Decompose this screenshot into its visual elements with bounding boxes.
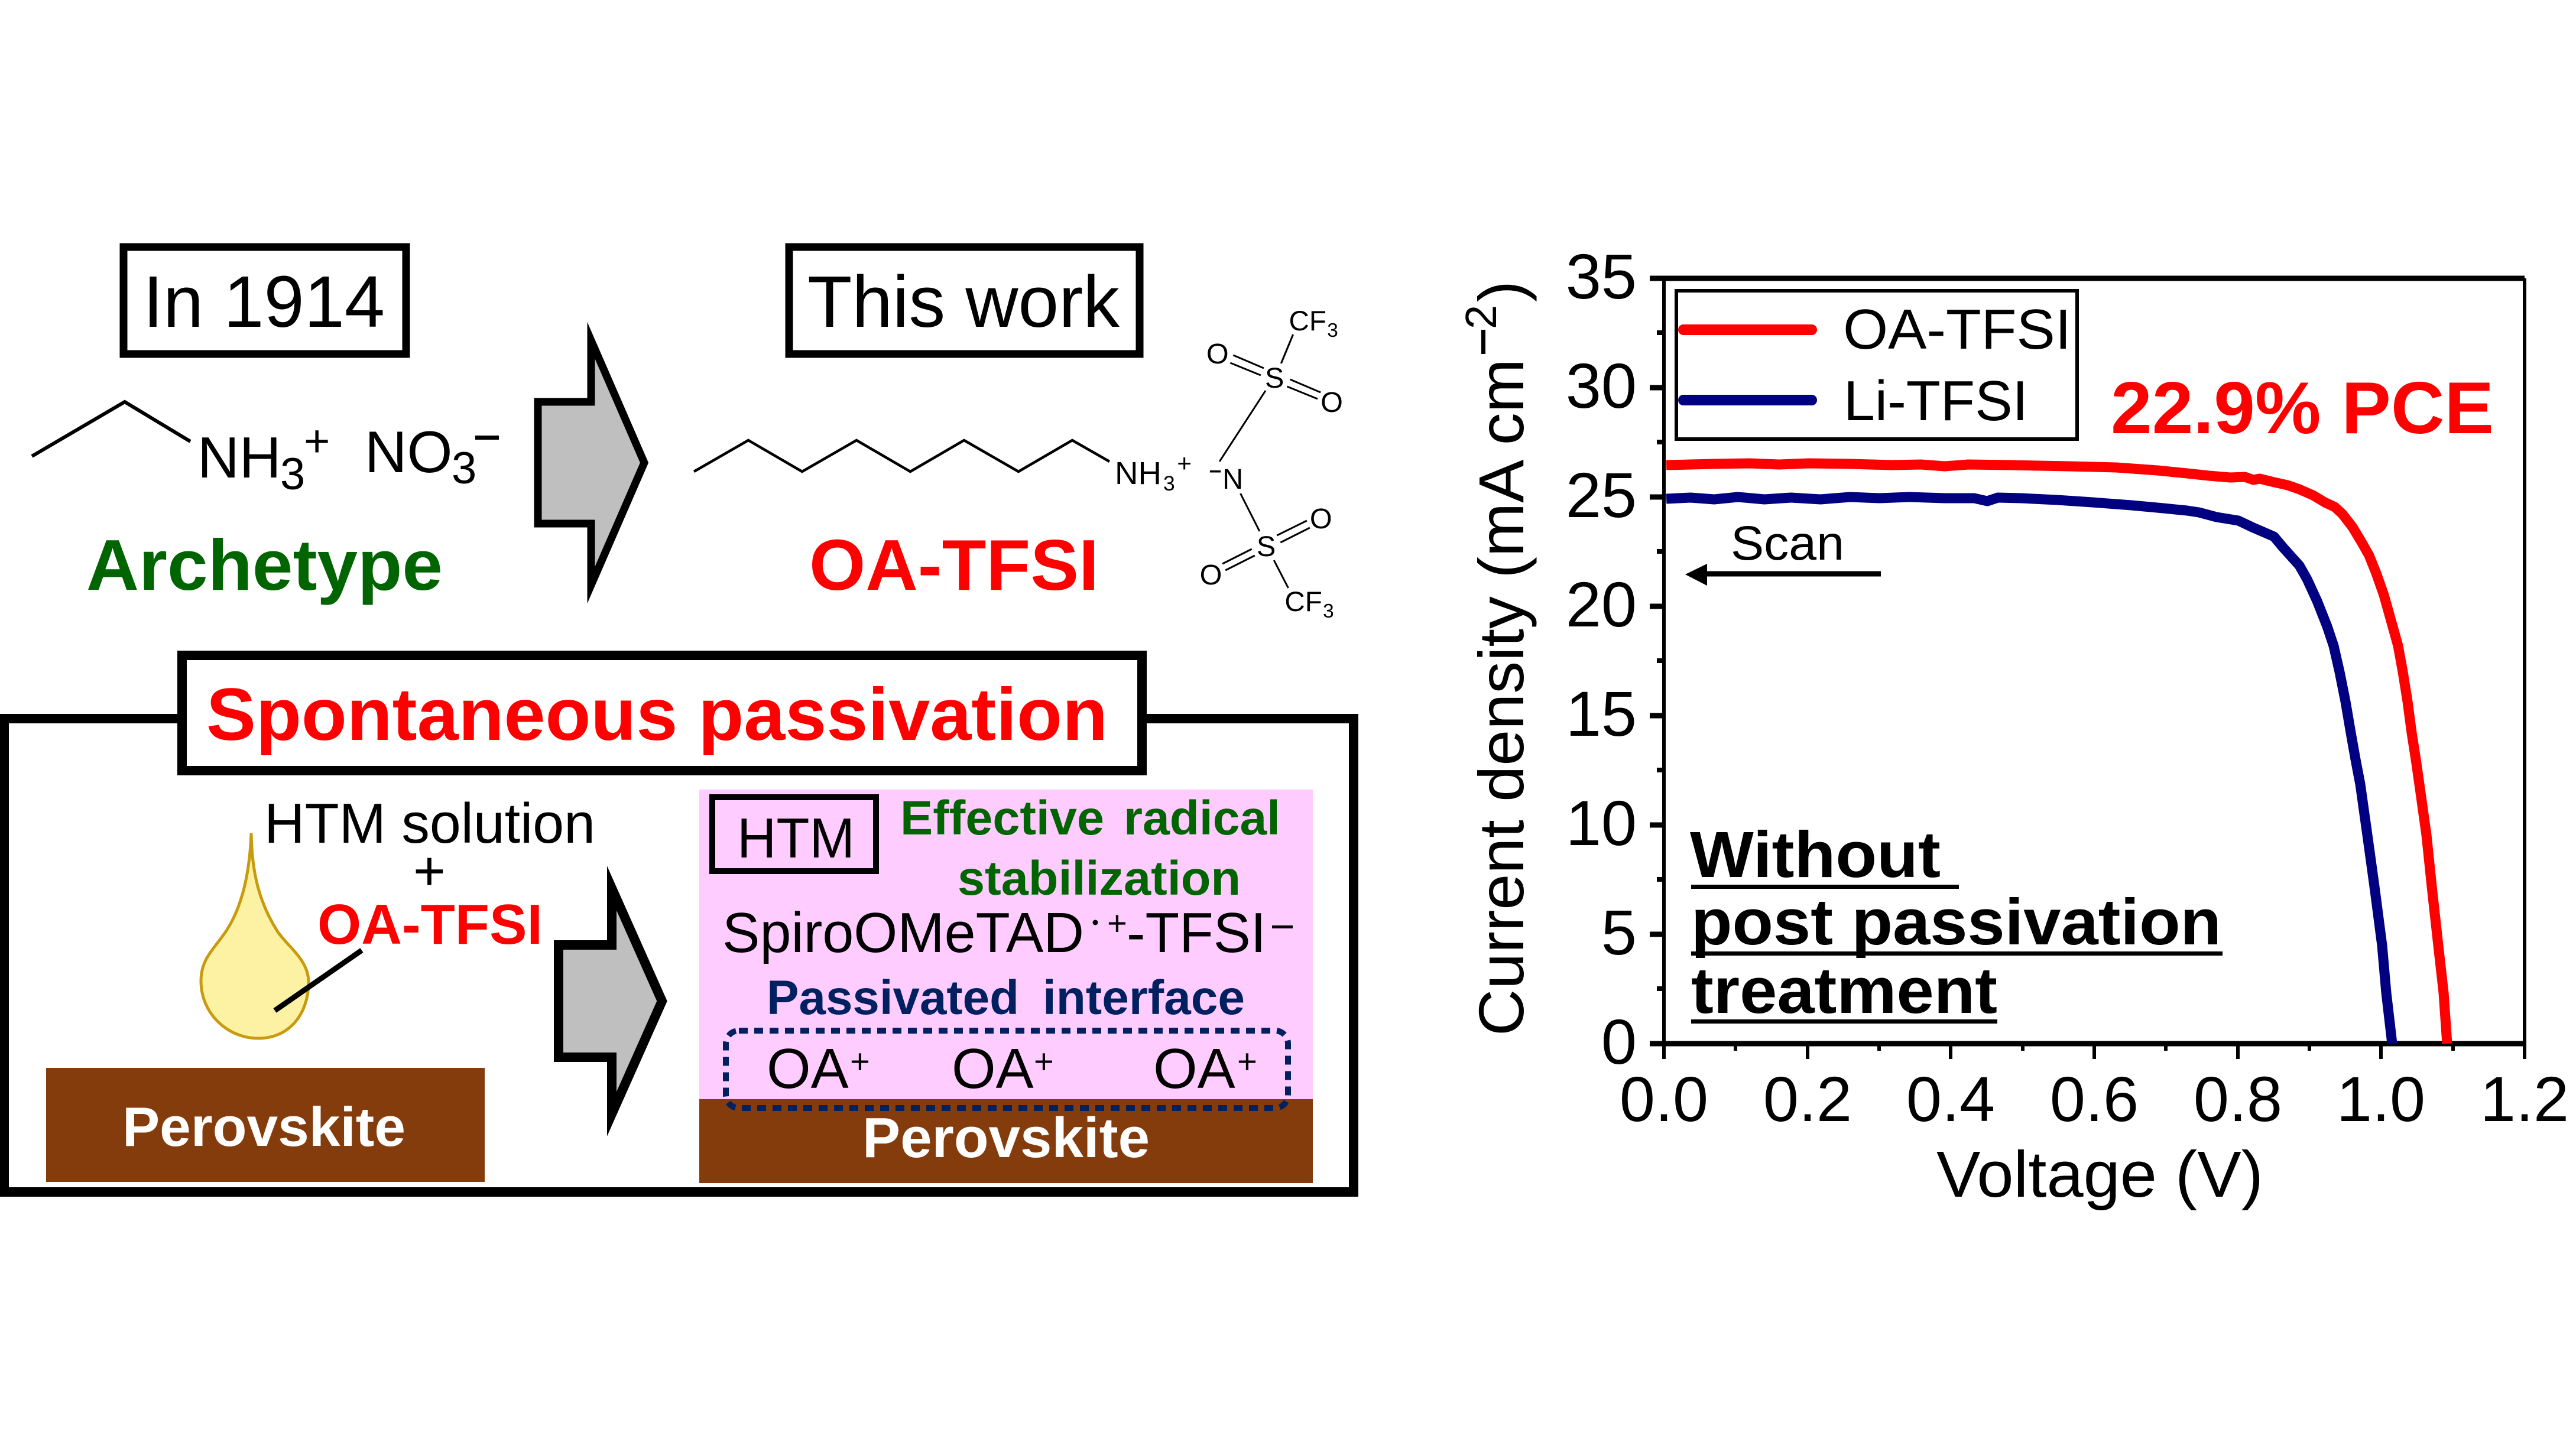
note: without post passivation treatment: post passivation	[1691, 886, 2221, 959]
scan direction arrow	[1685, 517, 1881, 586]
heading: Spontaneous passivation: Spontaneous passivation	[206, 674, 1108, 756]
curve: OA-TFSI	[1666, 463, 2447, 1044]
molecule: ethylammonium nitrate: NH	[197, 425, 281, 490]
molecule: ethylammonium nitrate: 3	[452, 443, 476, 493]
molecule: OA-TFSI structure: O	[1310, 503, 1332, 535]
molecule: ethylammonium nitrate	[32, 402, 499, 499]
text: HTM solution + OA-TFSI: OA-TFSI	[317, 893, 543, 956]
x axis title: Voltage (V)	[1936, 1138, 2263, 1211]
OA+ cations row: OA	[1153, 1037, 1235, 1100]
perovskite layer: left	[46, 1068, 485, 1182]
heading: This work	[789, 247, 1140, 354]
text: SpiroOMeTAD radical cation TFSI: -TFSI	[1127, 901, 1266, 964]
molecule: OA-TFSI structure	[694, 306, 1343, 622]
y axis tick labels: 15	[1566, 678, 1637, 749]
legend: OA-TFSI	[1843, 298, 2071, 361]
molecule: ethylammonium nitrate: 3	[280, 449, 305, 499]
label: HTM	[712, 797, 876, 871]
note: without post passivation treatment	[1690, 818, 2223, 1027]
perovskite layer: left: Perovskite	[122, 1096, 405, 1158]
molecule: OA-TFSI structure: O	[1200, 559, 1222, 591]
note: without post passivation treatment: Without	[1690, 818, 1941, 891]
callout: 22.9% PCE: 22.9% PCE	[2111, 368, 2494, 449]
x axis tick labels: 1.0	[2337, 1063, 2425, 1135]
molecule: OA-TFSI structure: 3	[1323, 600, 1334, 622]
text: SpiroOMeTAD radical cation TFSI	[722, 901, 1293, 964]
dotted interface outline	[726, 1031, 1288, 1108]
OA+ cations row: +	[1237, 1042, 1257, 1081]
x axis tick labels: 0.6	[2050, 1063, 2139, 1135]
y axis tick labels: 35	[1566, 241, 1637, 312]
OA+ cations row: OA	[767, 1037, 849, 1100]
molecule: OA-TFSI structure: CF	[1289, 306, 1326, 337]
legend	[1676, 291, 2077, 439]
arrow: solution to passivated stack	[559, 888, 662, 1114]
text: SpiroOMeTAD radical cation TFSI: SpiroOMeTAD	[722, 901, 1084, 964]
heading: This work: This work	[807, 262, 1120, 343]
y axis title: Current density (mA cm	[1465, 359, 1537, 1036]
OA+ cations row: +	[850, 1042, 870, 1081]
heading: Spontaneous passivation	[182, 655, 1142, 771]
scan direction arrow: Scan	[1731, 517, 1844, 570]
text: effective radical stabilization: stabilization	[958, 852, 1241, 905]
panel: HTM layer	[699, 790, 1313, 1100]
molecule: OA-TFSI structure: S	[1265, 362, 1284, 394]
perovskite layer: right	[699, 1099, 1313, 1183]
curve: Li-TFSI	[1666, 497, 2392, 1044]
x axis tick labels: 0.0	[1620, 1063, 1708, 1135]
x axis tick labels: 0.2	[1763, 1063, 1852, 1135]
label: HTM: HTM	[737, 807, 855, 870]
OA+ cations row: +	[1034, 1042, 1054, 1081]
label: Archetype: Archetype	[86, 525, 443, 605]
x axis tick labels: 0.8	[2194, 1063, 2282, 1135]
OA+ cations row: OA	[952, 1037, 1034, 1100]
y axis tick labels: 25	[1566, 459, 1637, 531]
text: HTM solution + OA-TFSI: +	[413, 840, 446, 902]
molecule: ethylammonium nitrate: NO	[365, 419, 453, 485]
y axis tick labels: 20	[1566, 569, 1637, 640]
molecule: OA-TFSI structure: O	[1206, 338, 1229, 370]
note: without post passivation treatment: treatment	[1691, 954, 1997, 1027]
chart: J-V curves	[1456, 241, 2569, 1211]
panel: spontaneous passivation	[4, 655, 1354, 1192]
molecule: OA-TFSI structure: +	[1177, 449, 1192, 477]
perovskite layer: right: Perovskite	[862, 1106, 1150, 1170]
text: effective radical stabilization: radical	[1124, 791, 1280, 845]
heading: In 1914	[124, 247, 406, 354]
molecule: OA-TFSI structure: 3	[1163, 472, 1175, 495]
panel: in 1914 archetype	[32, 247, 499, 605]
text: SpiroOMeTAD radical cation TFSI: +	[1107, 904, 1127, 943]
text: HTM solution + OA-TFSI: HTM solution	[264, 792, 595, 855]
plot frame and ticks	[1650, 278, 2525, 1059]
y axis title: )	[1465, 281, 1537, 302]
text: HTM solution + OA-TFSI	[264, 792, 595, 956]
label: OA-TFSI: OA-TFSI	[809, 525, 1099, 605]
y axis tick labels: 10	[1566, 787, 1637, 859]
y axis tick labels: 30	[1566, 350, 1637, 421]
x axis tick labels: 1.2	[2480, 1063, 2569, 1135]
y axis tick labels: 0	[1601, 1006, 1637, 1077]
text: passivated interface: Passivated	[767, 971, 1019, 1025]
y axis tick labels	[1566, 241, 1637, 1077]
text: passivated interface: interface	[1043, 971, 1245, 1025]
panel: this work OA-TFSI	[694, 247, 1343, 622]
molecule: OA-TFSI structure: O	[1321, 386, 1343, 418]
x axis tick labels: 0.4	[1906, 1063, 1995, 1135]
text: passivated interface	[767, 971, 1245, 1025]
molecule: OA-TFSI structure: N	[1222, 463, 1243, 495]
heading: In 1914: In 1914	[143, 262, 385, 343]
molecule: OA-TFSI structure: 3	[1327, 320, 1338, 342]
y axis title: 2	[1456, 305, 1506, 329]
text: effective radical stabilization	[900, 791, 1280, 905]
y axis tick labels: 5	[1601, 896, 1637, 968]
molecule: OA-TFSI structure: CF	[1284, 586, 1322, 618]
x axis tick labels	[1620, 1063, 2569, 1135]
OA+ cations row	[767, 1037, 1257, 1100]
legend: Li-TFSI	[1844, 369, 2028, 433]
molecule: ethylammonium nitrate: +	[304, 416, 330, 466]
molecule: OA-TFSI structure: NH	[1115, 455, 1162, 491]
icon: droplet with leader line	[201, 833, 362, 1038]
molecule: OA-TFSI structure: S	[1257, 531, 1276, 563]
arrow: archetype to this work	[538, 340, 644, 585]
text: effective radical stabilization: Effective	[900, 791, 1104, 845]
